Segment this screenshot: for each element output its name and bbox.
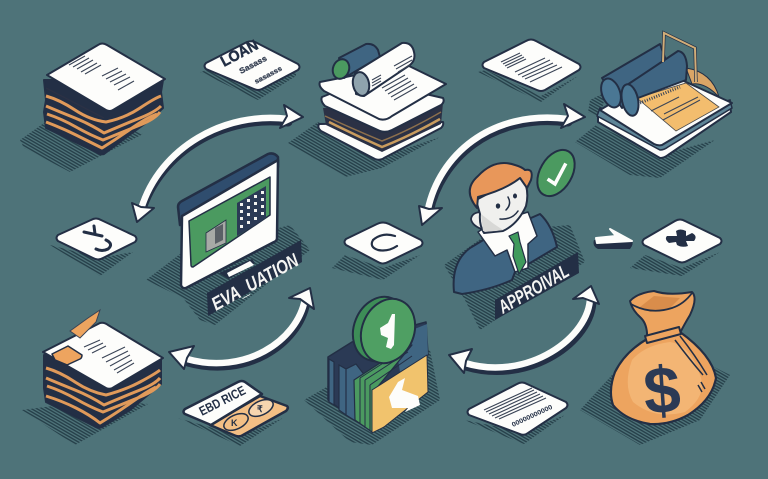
arrow: small right xyxy=(594,229,633,249)
hanger xyxy=(663,33,696,82)
tie xyxy=(509,232,526,274)
dark folders xyxy=(328,322,428,418)
approval label: APPROIVAL xyxy=(494,261,573,319)
diamond card: left icon xyxy=(50,218,136,276)
card small text: Sasass xyxy=(238,53,269,76)
screen xyxy=(189,177,270,267)
binder with orange form: top right xyxy=(575,33,732,178)
card: LOAN xyxy=(200,37,300,100)
blue roll xyxy=(339,44,380,78)
panel: evaluation monitor xyxy=(146,153,310,325)
orange hook xyxy=(686,68,719,97)
blue cylinders xyxy=(602,44,668,108)
dollar sign: $ xyxy=(641,352,683,428)
hair xyxy=(470,163,532,208)
arrow: bottom left loop xyxy=(169,288,314,369)
paper stack: top left xyxy=(20,44,165,172)
green coin xyxy=(344,289,416,369)
card: LOAN: sasasss xyxy=(254,65,284,86)
check badge xyxy=(530,143,582,203)
diamond card: C icon xyxy=(332,222,422,280)
card: orange coupon: K xyxy=(231,418,238,428)
stand xyxy=(219,259,255,279)
face xyxy=(476,176,527,233)
evaluation label: EVA_UATION xyxy=(208,250,303,315)
bag body xyxy=(611,332,716,424)
monitor body xyxy=(178,153,278,225)
paper stack with rolls: top centre xyxy=(288,43,446,177)
ear xyxy=(471,212,484,230)
paper stack with orange tab: bottom left xyxy=(22,310,163,445)
card: orange coupon: EBD RICE xyxy=(197,382,248,419)
orange form xyxy=(637,83,719,131)
orange flag xyxy=(70,310,100,338)
suit xyxy=(454,214,557,294)
card: barcode xyxy=(464,382,568,444)
bag tie string xyxy=(675,336,707,392)
arrow: top centre loop xyxy=(419,104,585,225)
card: orange coupon: ₹ xyxy=(257,404,263,414)
card title: LOAN xyxy=(218,37,261,71)
orange tab xyxy=(52,346,82,365)
card: orange coupon xyxy=(178,381,288,446)
diamond card: plus icon xyxy=(630,220,722,276)
coupon buttons xyxy=(221,410,251,434)
yellow folder xyxy=(372,355,428,433)
card: barcode: 00000000000 xyxy=(511,404,554,429)
green notes xyxy=(354,345,412,432)
arrow: top left loop xyxy=(132,105,303,222)
panel: approver person xyxy=(444,143,585,330)
white roll xyxy=(355,43,414,96)
card: document xyxy=(478,40,580,102)
money bag xyxy=(580,291,730,445)
collar and shirt xyxy=(478,212,537,272)
arrow: bottom centre loop xyxy=(449,286,599,373)
bag neck and flare xyxy=(630,291,695,340)
panel: folders, coin and cash xyxy=(304,289,440,445)
